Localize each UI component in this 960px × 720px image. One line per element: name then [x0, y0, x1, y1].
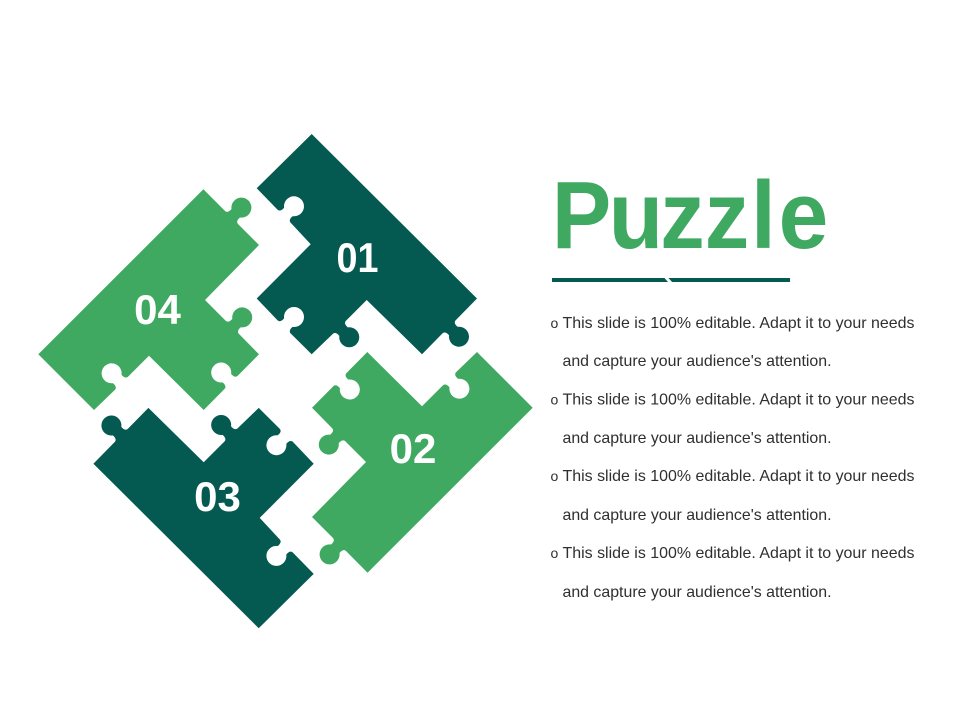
- piece 02: [312, 352, 533, 573]
- bullet 1: This slide is 100% editable. Adapt it to your needs: [562, 315, 914, 332]
- piece 01: [257, 134, 477, 354]
- bullet 1: o: [550, 315, 558, 331]
- number 02: 02: [390, 425, 436, 472]
- number 03: 03: [194, 473, 241, 520]
- title: Puzzle: [552, 161, 828, 269]
- bullet 1: [550, 315, 914, 370]
- bullet 3: [550, 468, 914, 524]
- number 01: 01: [336, 234, 378, 281]
- piece 03: [93, 408, 314, 628]
- title underline: [552, 278, 790, 282]
- bullet list: [550, 315, 914, 601]
- bullet 1: and capture your audience's attention.: [562, 353, 832, 370]
- bullet 3: This slide is 100% editable. Adapt it to your needs: [562, 468, 914, 485]
- piece 04: [38, 189, 259, 410]
- bullet 2: o: [550, 392, 558, 408]
- bullet 2: This slide is 100% editable. Adapt it to your needs: [562, 392, 914, 408]
- bullet 4: o: [550, 545, 558, 561]
- bullet 4: and capture your audience's attention.: [562, 584, 832, 601]
- puzzle diagram: [38, 134, 533, 628]
- bullet 3: o: [550, 468, 558, 484]
- bullet 4: [550, 545, 914, 601]
- bullet 4: This slide is 100% editable. Adapt it to your needs: [562, 545, 914, 562]
- bullet 3: and capture your audience's attention.: [562, 507, 832, 524]
- bullet 2: and capture your audience's attention.: [562, 430, 832, 447]
- bullet 2: [550, 392, 914, 447]
- number 04: 04: [134, 286, 181, 333]
